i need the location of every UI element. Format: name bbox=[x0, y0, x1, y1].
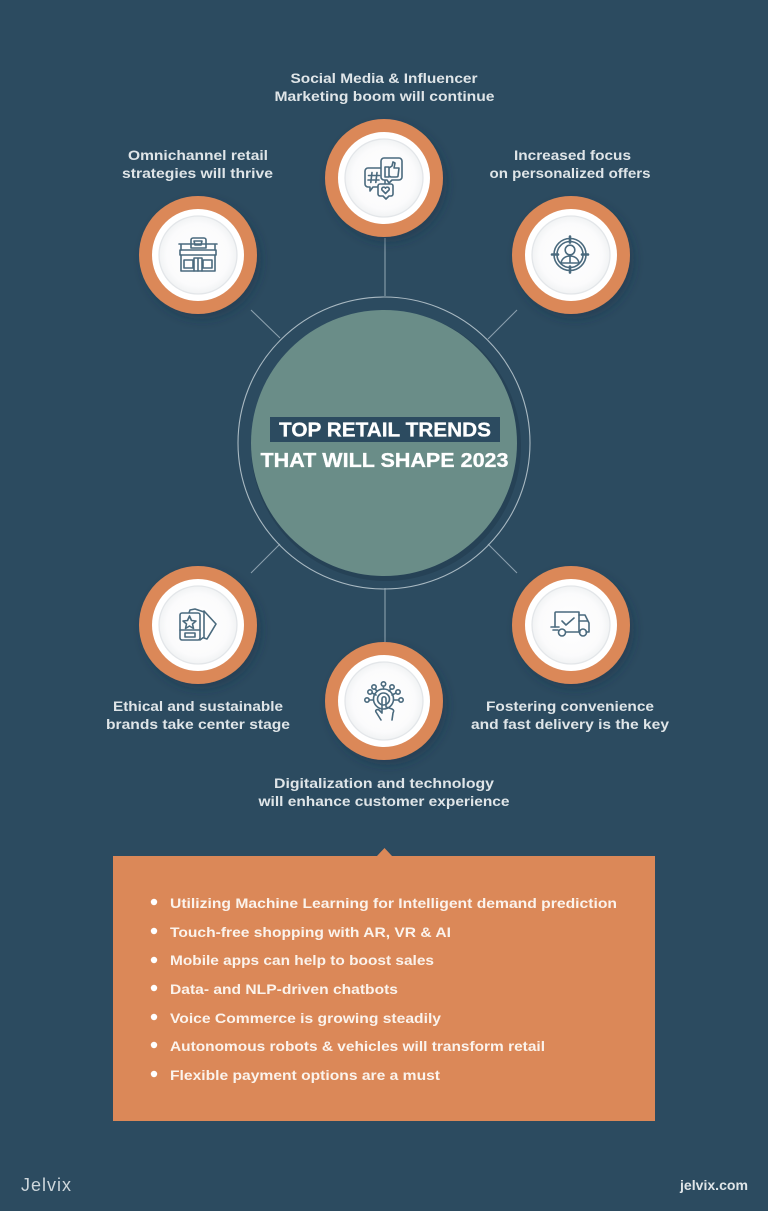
icon: delivery truck bbox=[551, 612, 589, 636]
central circle bbox=[238, 297, 530, 589]
trend: ethical brands: brands take center stage bbox=[106, 716, 290, 732]
trend: social media: Social Media & Influencer bbox=[290, 70, 478, 86]
icon: touch network bbox=[365, 682, 403, 720]
trend: personalized offers bbox=[490, 147, 651, 314]
trend: social media bbox=[274, 70, 495, 237]
trend: social media: Marketing boom will continue bbox=[274, 88, 495, 104]
icon: cards with star bbox=[180, 609, 216, 640]
trend: digitalization: Digitalization and technology bbox=[274, 775, 494, 791]
panel: digital trends list bbox=[113, 848, 655, 1121]
title bbox=[260, 417, 508, 472]
trend: omnichannel: Omnichannel retail bbox=[128, 147, 268, 163]
trend: omnichannel bbox=[122, 147, 273, 314]
trend: delivery bbox=[471, 566, 669, 732]
icon: store bbox=[179, 238, 217, 271]
list item 3: Mobile apps can help to boost sales bbox=[170, 952, 434, 968]
list item 5: Voice Commerce is growing steadily bbox=[170, 1010, 441, 1026]
title: THAT WILL SHAPE 2023 bbox=[260, 450, 508, 472]
list item 6: Autonomous robots & vehicles will transform retail bbox=[170, 1038, 545, 1054]
trend: digitalization bbox=[257, 642, 510, 809]
list item 7: Flexible payment options are a must bbox=[170, 1067, 440, 1083]
trend: ethical brands bbox=[106, 566, 290, 732]
website: jelvix.com bbox=[679, 1177, 748, 1193]
trend: delivery: Fostering convenience bbox=[486, 698, 654, 714]
connector lines bbox=[251, 238, 517, 642]
icon: social media bubbles bbox=[365, 158, 402, 199]
trend: personalized offers: Increased focus bbox=[514, 147, 631, 163]
trend: omnichannel: strategies will thrive bbox=[122, 165, 273, 181]
trend: personalized offers: on personalized offers bbox=[490, 165, 651, 181]
trend: delivery: and fast delivery is the key bbox=[471, 716, 669, 732]
list item 2: Touch-free shopping with AR, VR & AI bbox=[170, 924, 451, 940]
title: TOP RETAIL TRENDS bbox=[279, 420, 491, 442]
icon: target person bbox=[552, 236, 588, 272]
list item 1: Utilizing Machine Learning for Intelligent demand prediction bbox=[170, 895, 617, 911]
list item 4: Data- and NLP-driven chatbots bbox=[170, 981, 398, 997]
trend: digitalization: will enhance customer experience bbox=[257, 793, 510, 809]
logo: Jelvix bbox=[21, 1175, 71, 1195]
trend: ethical brands: Ethical and sustainable bbox=[113, 698, 283, 714]
